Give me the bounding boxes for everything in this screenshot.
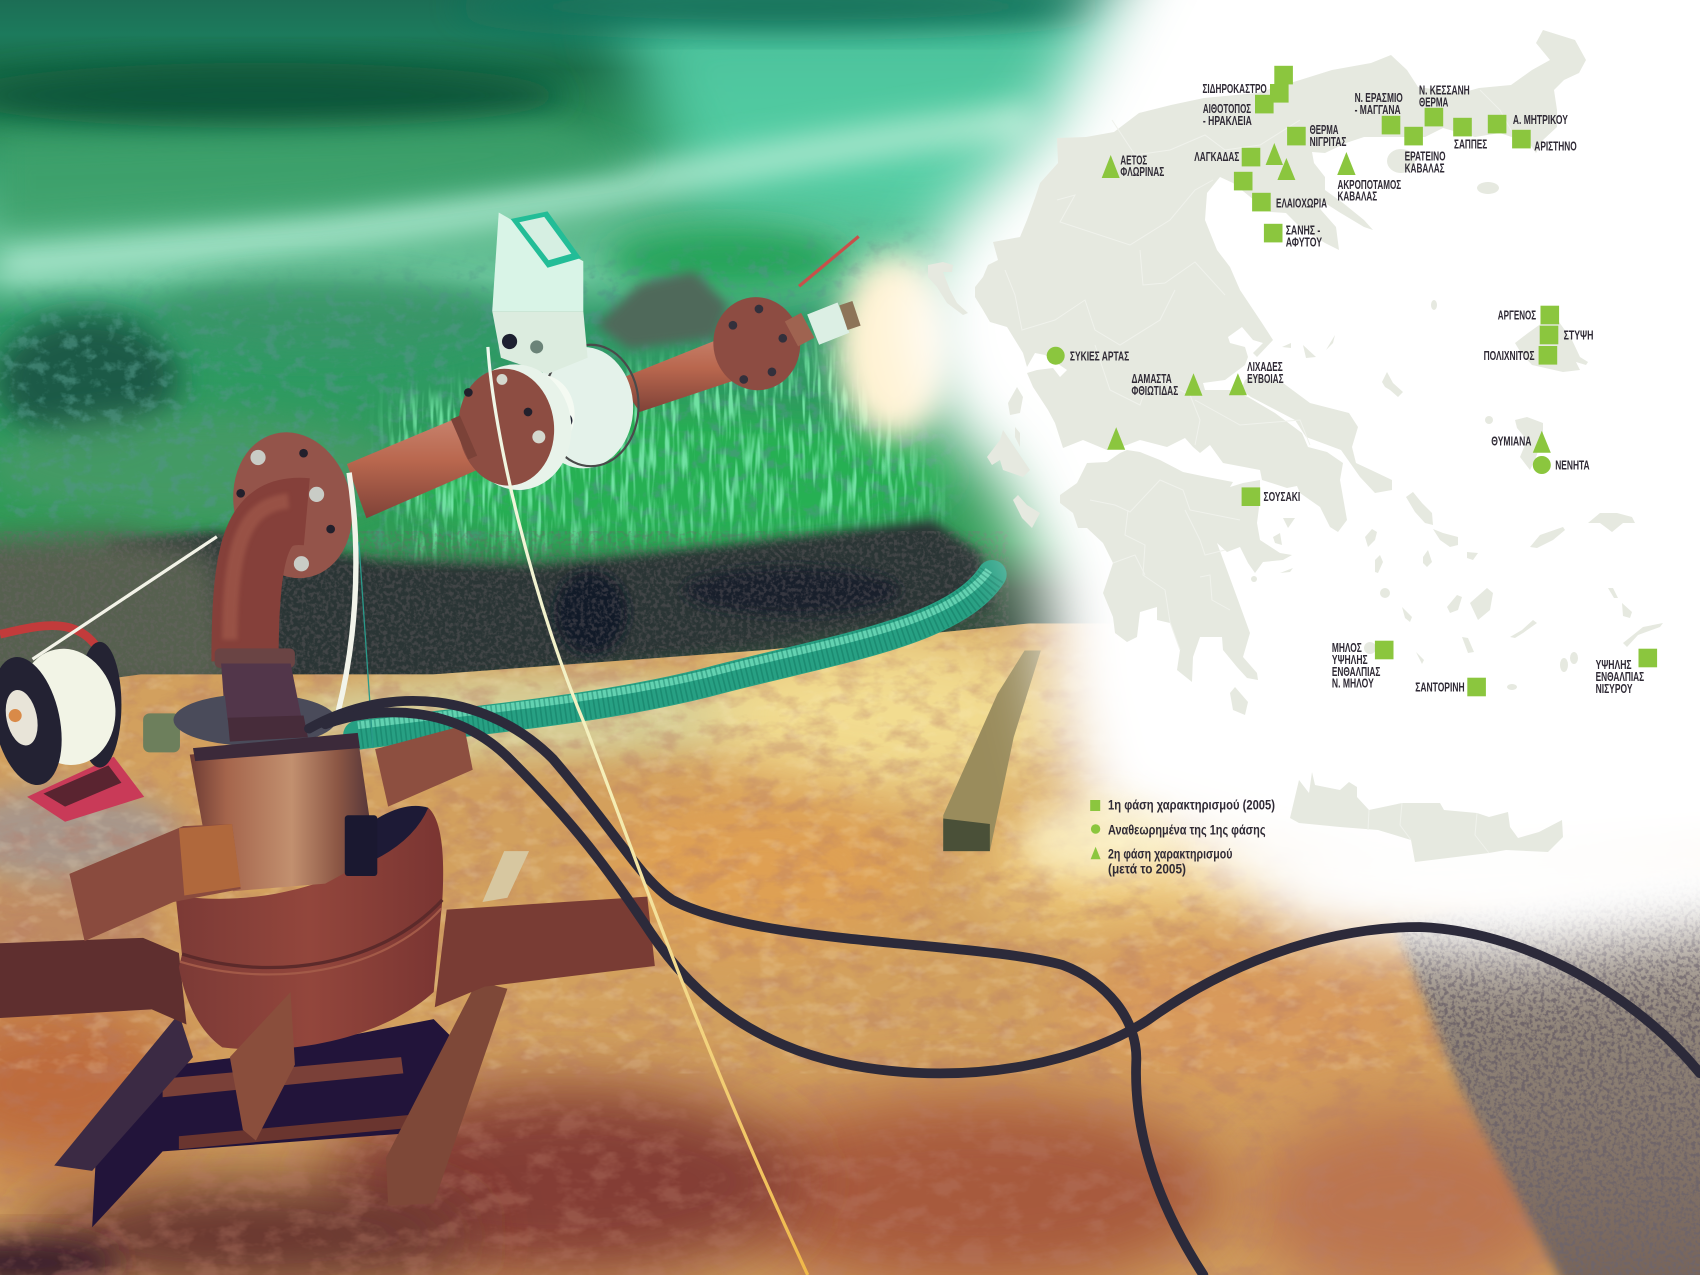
- site: Milos: ΜΗΛΟΣ: [1332, 641, 1362, 655]
- site: Damasta Fthiotidas: ΔΑΜΑΣΤΑ: [1132, 372, 1172, 386]
- Euboea: [1241, 375, 1392, 493]
- site: Nisyros: ΝΙΣΥΡΟΥ: [1596, 682, 1633, 696]
- Aegean and Ionian islands: [928, 149, 1663, 715]
- site: Sani Afytou: ΑΦΥΤΟΥ: [1286, 236, 1323, 250]
- site: Sousaki: ΣΟΥΣΑΚΙ: [1264, 490, 1300, 504]
- gravel verge: [1394, 898, 1700, 1275]
- site: Stypsi: ΣΤΥΨΗ: [1564, 328, 1594, 342]
- site: Aetos Florinas: [1102, 154, 1165, 179]
- site: Damasta Fthiotidas: [1132, 372, 1202, 398]
- site: N. Erasmio Magana: Ν. ΕΡΑΣΜΙΟ: [1355, 91, 1403, 105]
- site: A. Mitrikou: Α. ΜΗΤΡΙΚΟΥ: [1513, 113, 1568, 127]
- site: Damasta Fthiotidas: ΦΘΙΩΤΙΔΑΣ: [1132, 384, 1179, 398]
- site: Akropotamos Kavalas: ΑΚΡΟΠΟΤΑΜΟΣ: [1338, 178, 1401, 192]
- site: A. Mitrikou: [1488, 113, 1568, 133]
- site: Aithotopos Irakleia: ΑΙΘΟΤΟΠΟΣ: [1203, 102, 1251, 116]
- site: Aristino: [1512, 130, 1577, 154]
- site: Akropotamos Kavalas: ΚΑΒΑΛΑΣ: [1338, 190, 1377, 204]
- legend item: second phase: [1091, 845, 1232, 876]
- white fade behind the map: [835, 0, 1700, 954]
- elbow and riser pipe: [215, 501, 307, 724]
- background: grass field and stream: [0, 0, 1165, 678]
- legend item: second phase: (μετά το 2005): [1108, 860, 1186, 876]
- white straps and thin teal wire: [338, 473, 373, 748]
- site: Akropotamos Kavalas: [1337, 152, 1401, 204]
- site: Erateino Kavalas: ΕΡΑΤΕΙΝΟ: [1405, 150, 1446, 164]
- site: Milos: Ν. ΜΗΛΟΥ: [1332, 676, 1374, 690]
- site: N. Erasmio Magana: [1355, 91, 1403, 134]
- site: Nenita: [1533, 456, 1590, 474]
- site: unnamed triangles near Lagkadas: [1266, 143, 1295, 180]
- cable reel with red frame: [0, 537, 217, 822]
- site: Sykies Artas: ΣΥΚΙΕΣ ΑΡΤΑΣ: [1070, 350, 1130, 364]
- Peloponnese: [1060, 450, 1292, 682]
- legend item: first phase: 1η φάση χαρακτηρισμού (2005): [1108, 796, 1275, 812]
- green suction hose: [358, 570, 992, 735]
- site: Aristino: ΑΡΙΣΤΗΝΟ: [1534, 140, 1577, 154]
- site: Therma Nigritas: ΘΕΡΜΑ: [1310, 123, 1338, 137]
- site: Sidirokastro: ΣΙΔΗΡΟΚΑΣΤΡΟ: [1202, 82, 1267, 96]
- site: Nisyros: ΕΝΘΑΛΠΙΑΣ: [1596, 670, 1644, 684]
- site: Sappes: [1453, 118, 1488, 152]
- site: Sykies Artas: [1047, 347, 1130, 365]
- site: Nenita: ΝΕΝΗΤΑ: [1555, 458, 1590, 472]
- site: Lichades Evvoias: ΕΥΒΟΙΑΣ: [1247, 372, 1284, 386]
- site: Nisyros: ΥΨΗΛΗΣ: [1596, 658, 1632, 672]
- site: Thymiana: ΘΥΜΙΑΝΑ: [1491, 434, 1532, 448]
- site: Erateino Kavalas: ΚΑΒΑΛΑΣ: [1405, 162, 1445, 176]
- legend item: second phase: 2η φάση χαρακτηρισμού: [1108, 845, 1232, 861]
- site: Milos: [1332, 641, 1394, 690]
- site: Elaiochoria: ΕΛΑΙΟΧΩΡΙΑ: [1276, 196, 1327, 210]
- Crete: [1290, 772, 1563, 862]
- site: Nisyros: [1596, 649, 1657, 696]
- site: Sani Afytou: ΣΑΝΗΣ -: [1286, 224, 1320, 238]
- site: Sappes: ΣΑΠΠΕΣ: [1454, 138, 1488, 152]
- site: Polichnitos: ΠΟΛΙΧΝΙΤΟΣ: [1484, 349, 1535, 363]
- site: Erateino Kavalas: [1404, 127, 1446, 176]
- horizontal rusty pipe with flanges: [215, 211, 859, 724]
- legend item: revised first phase: Αναθεωρημένα της 1ης φάσης: [1108, 822, 1266, 838]
- middle flange: [453, 359, 578, 495]
- site: N. Erasmio Magana: - ΜΑΓΓΑΝΑ: [1355, 103, 1401, 117]
- map sites and labels: [1047, 66, 1657, 696]
- site: unnamed square west of Elaiochoria: [1234, 172, 1252, 190]
- wooden plank: [943, 651, 1041, 851]
- site: N. Kessani Therma: ΘΕΡΜΑ: [1419, 96, 1448, 110]
- site: Aetos Florinas: ΑΕΤΟΣ: [1120, 154, 1148, 168]
- site: Aetos Florinas: ΦΛΩΡΙΝΑΣ: [1120, 165, 1165, 179]
- legend: [1090, 796, 1275, 876]
- site: Stypsi: [1540, 326, 1594, 344]
- site: Argenos: ΑΡΓΕΝΟΣ: [1498, 308, 1536, 322]
- site: Therma Nigritas: ΝΙΓΡΙΤΑΣ: [1310, 135, 1347, 149]
- regional boundaries are drawn as light strokes: [1005, 90, 1511, 853]
- site: Lichades Evvoias: [1229, 360, 1284, 395]
- site: N. Kessani Therma: Ν. ΚΕΣΣΑΝΗ: [1419, 84, 1470, 98]
- site: Sani Afytou: [1264, 224, 1323, 250]
- elbow flange: [218, 420, 367, 591]
- flow meter with digital display: [492, 211, 639, 468]
- site: N. Kessani Therma: [1419, 84, 1470, 126]
- map of Greece: [928, 30, 1663, 862]
- site: Elaiochoria: [1252, 193, 1327, 211]
- ground: rust-stained concrete slab: [0, 618, 1700, 1275]
- wellhead base: rusty sleeve, rings, arms and legs: [0, 664, 655, 1227]
- black power cables: [309, 701, 1700, 1275]
- site: Aithotopos Irakleia: [1203, 95, 1274, 128]
- site: Milos: ΕΝΘΑΛΠΙΑΣ: [1332, 665, 1381, 679]
- end flange and valve: [707, 236, 859, 396]
- site: Lichades Evvoias: ΛΙΧΑΔΕΣ: [1247, 360, 1283, 374]
- site: Aithotopos Irakleia: - ΗΡΑΚΛΕΙΑ: [1203, 114, 1252, 128]
- site: Sousaki: [1242, 487, 1300, 506]
- pale yellow measuring wire: [488, 347, 808, 1275]
- site: Therma Nigritas: [1287, 123, 1347, 149]
- site: unnamed triangle on the Gulf of Corinth: [1107, 427, 1125, 450]
- site: Milos: ΥΨΗΛΗΣ: [1332, 653, 1368, 667]
- mainland: [975, 30, 1586, 532]
- site: Lagkadas: ΛΑΓΚΑΔΑΣ: [1194, 150, 1240, 164]
- site: Thymiana: [1491, 431, 1551, 453]
- site: Santorini: ΣΑΝΤΟΡΙΝΗ: [1415, 680, 1465, 694]
- site: Sidirokastro: [1202, 66, 1293, 103]
